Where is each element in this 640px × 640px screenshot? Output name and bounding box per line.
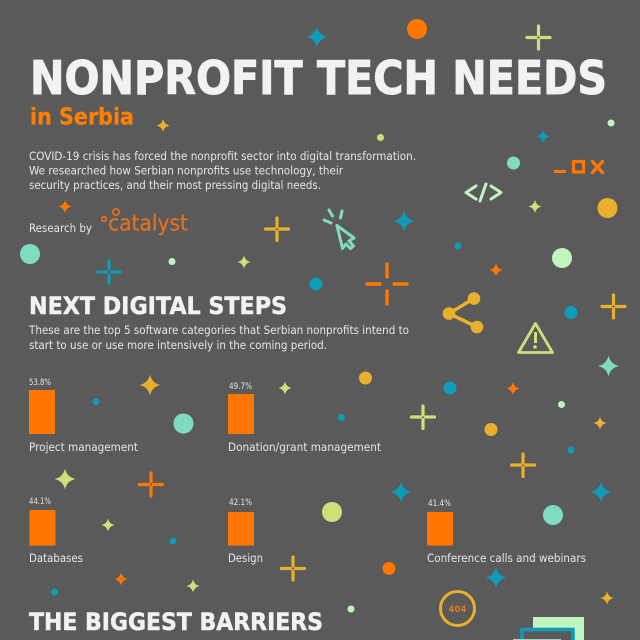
catalyst logo: catalyst [108,212,188,236]
heading: next digital steps: NEXT DIGITAL STEPS [29,292,287,320]
icon: share [443,292,483,333]
icon: browser windows [513,617,584,640]
bar: design: 42.1% [229,498,252,508]
bar: conference calls and webinars: Conference calls and webinars [427,551,586,565]
section description: start to use or use more intensively in the coming period. [29,338,327,352]
bar: conference calls and webinars: 41.4% [428,499,451,509]
icon: cursor click [324,210,354,248]
bar: conference calls and webinars [427,499,586,565]
bar: design [228,498,263,565]
subtitle: in Serbia [30,104,134,130]
section description: These are the top 5 software categories that Serbian nonprofits intend to [28,323,409,337]
bar: donation/grant management [228,382,381,454]
icon: 404 error: 404 [449,605,466,615]
intro text [29,149,416,192]
intro text: security practices, and their most pressing digital needs. [29,178,321,192]
decorative confetti: plus marks [98,26,625,580]
bar: project management [29,378,138,454]
bar: donation/grant management: Donation/grant management [228,440,381,454]
bar: databases: 44.1% [29,497,51,507]
bar: project management: Project management [29,440,138,454]
section description [28,323,409,352]
bar: donation/grant management: 49.7% [229,382,252,392]
intro text: We researched how Serbian nonprofits use technology, their [29,164,343,178]
icon: window controls [554,162,602,172]
heading: the biggest barriers: THE BIGGEST BARRIERS [29,608,323,636]
icon: code brackets [466,184,501,201]
icon: warning triangle [518,324,552,352]
bar: project management: 53.8% [29,378,51,388]
icon: 404 error [440,592,474,626]
bar: databases [29,497,83,565]
research credit: Research by [29,221,92,235]
intro text: COVID-19 crisis has forced the nonprofit sector into digital transformation. [29,149,416,163]
bar: design: Design [228,551,263,565]
bar: databases: Databases [29,551,83,565]
decorative confetti: four-point stars [54,26,619,604]
